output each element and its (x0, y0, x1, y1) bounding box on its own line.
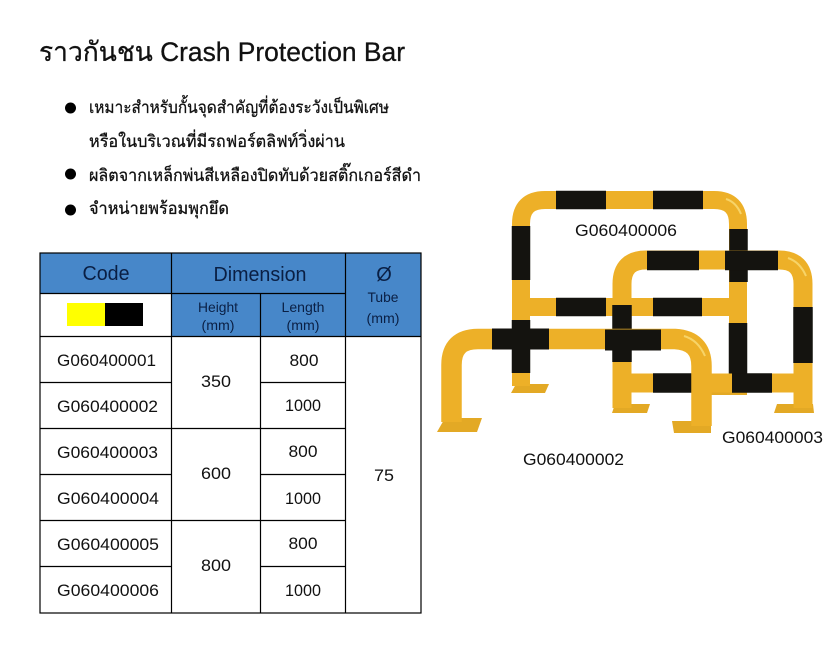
label G060400003: G060400003 (722, 428, 823, 447)
code column: G060400005 (57, 535, 159, 554)
header labels: (mm) (286, 317, 320, 333)
length column (285, 351, 321, 600)
code column: G060400002 (57, 397, 158, 416)
table grid (40, 253, 421, 613)
header labels: Length (282, 299, 324, 315)
header labels: Dimension (214, 264, 306, 286)
title: ราวกันชน Crash Protection Bar (39, 37, 405, 67)
header labels: Ø (376, 264, 392, 286)
header labels (82, 263, 400, 333)
bullet 3: จำหน่ายพร้อมพุกยึด (89, 199, 229, 219)
length column: 1000 (285, 396, 321, 415)
header labels: (mm) (202, 317, 234, 333)
bullet 1: หรือในบริเวณที่มีรถฟอร์ตลิฟท์วิ่งผ่าน (89, 129, 345, 151)
code column: G060400003 (57, 443, 158, 462)
tube value: 75 (374, 466, 394, 485)
header labels: Tube (368, 289, 399, 305)
height column: 600 (201, 464, 231, 483)
code column: G060400001 (57, 351, 156, 370)
label G060400002: G060400002 (523, 450, 624, 469)
front bar G060400002 (437, 336, 711, 433)
back bar G060400006 (511, 199, 747, 395)
bullet list (65, 95, 421, 219)
colour swatch cell (40, 294, 172, 336)
header labels: Height (198, 299, 238, 315)
height column: 800 (201, 556, 231, 575)
length column: 1000 (285, 581, 321, 600)
middle bar G060400003 (612, 258, 814, 413)
code column (57, 351, 159, 600)
header labels: Code (82, 263, 130, 285)
height column (201, 372, 231, 575)
code column: G060400004 (57, 489, 159, 508)
bullet 1: เหมาะสำหรับกั้นจุดสำคัญที่ต้องระวังเป็นพิเศษ (89, 95, 389, 118)
label G060400006: G060400006 (575, 221, 677, 240)
code column: G060400006 (57, 581, 159, 600)
length column: 800 (290, 351, 318, 370)
specification table (40, 253, 421, 613)
bullet 2: ผลิตจากเหล็กพ่นสีเหลืองปิดทับด้วยสติ๊กเกอร์สีดำ (89, 162, 421, 185)
bullet 1 (65, 95, 389, 151)
length column: 800 (288, 442, 318, 461)
product photo: crash bars (437, 199, 814, 433)
height column: 350 (201, 372, 231, 391)
table header background (40, 253, 421, 336)
length column: 800 (288, 534, 318, 553)
length column: 1000 (285, 489, 321, 508)
header labels: (mm) (366, 310, 400, 326)
